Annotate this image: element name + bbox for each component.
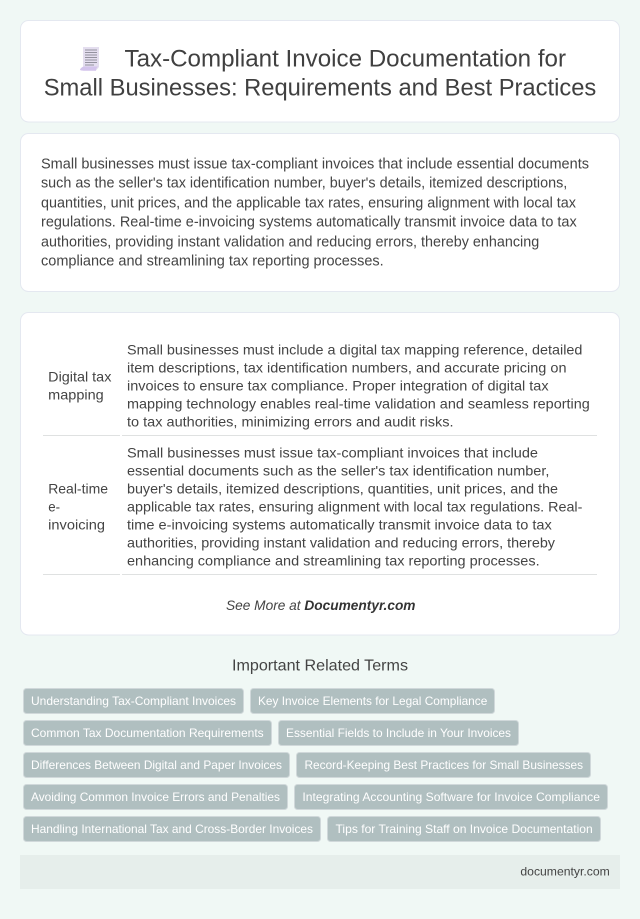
row description: authorities, providing instant validation and reducing errors, thereby [127,534,555,550]
row description: time e-invoicing systems automatically transmit invoice data to tax [127,516,552,532]
summary text: authorities, providing instant validation and reducing errors, thereby enhancing [41,234,539,250]
tag: Tips for Training Staff on Invoice Documentation [336,822,593,836]
tag [278,720,518,746]
tag: Understanding Tax-Compliant Invoices [31,694,236,708]
tag [294,784,608,810]
row description: mapping technology enables real-time validation and seamless reporting [127,395,590,411]
panel: details table card [20,312,620,635]
footer text: documentyr.com [520,865,610,879]
row label [48,368,111,402]
summary text: Small businesses must issue tax-compliant invoices that include essential documents [41,155,589,172]
icon: invoice receipt [80,47,99,71]
tag [296,752,590,778]
tag: Differences Between Digital and Paper Invoices [31,758,282,772]
panel: summary card [20,134,620,292]
tag: Record-Keeping Best Practices for Small Businesses [304,758,583,772]
summary text: such as the seller's tax identification number, buyer's details, itemized descriptions, [41,174,567,192]
tag: Key Invoice Elements for Legal Compliance [258,694,488,708]
title: Tax-Compliant Invoice Documentation for [124,46,566,73]
tag: Handling International Tax and Cross-Border Invoices [31,822,313,836]
tag: Avoiding Common Invoice Errors and Penalties [31,790,280,804]
row label: mapping [48,386,104,402]
row description: Small businesses must issue tax-compliant invoices that include [127,444,538,460]
row label [48,480,108,532]
tag [24,784,288,810]
row description: to tax authorities, minimizing errors and audit risks. [127,413,454,429]
tag [24,688,244,714]
tag [24,752,290,778]
row label: invoicing [48,516,105,532]
row description: buyer's details, itemized descriptions, quantities, unit prices, and the [127,480,558,496]
title: Small Businesses: Requirements and Best Practices [44,75,596,102]
tag [24,720,272,746]
panel: title card [20,20,620,122]
summary text: quantities, unit prices, and the applicable tax rates, ensuring alignment with local tax [41,194,576,211]
row description: invoices to ensure tax compliance. Proper integration of digital tax [127,377,549,393]
summary text [41,155,589,270]
tag: Essential Fields to Include in Your Invoices [286,726,511,740]
summary text: compliance and streamlining tax reporting processes. [41,253,384,270]
row label: Real-time [48,480,108,496]
title [44,46,596,102]
tag [250,688,494,714]
row description: Small businesses must include a digital tax mapping reference, detailed [127,341,582,357]
row label: Digital tax [48,368,111,384]
see more link: See More at Documentyr.com [226,597,416,613]
tag [24,816,320,842]
tag [328,816,600,842]
summary text: regulations. Real-time e-invoicing systems automatically transmit invoice data to tax [41,214,577,231]
row description: enhancing compliance and streamlining tax reporting processes. [127,552,540,568]
row label: e- [48,498,60,514]
table row: digital tax mapping [43,341,597,436]
tag: Integrating Accounting Software for Invoice Compliance [302,790,600,804]
footer bar [20,855,620,889]
related terms tags [24,688,608,842]
heading: important related terms: Important Related Terms [232,658,408,675]
row description: essential documents such as the seller's tax identification number, [127,462,549,478]
row description [127,341,590,429]
row description: applicable tax rates, ensuring alignment with local tax regulations. Real- [127,498,583,514]
row description [127,444,583,568]
table row: real-time e-invoicing [43,444,597,574]
row description: item descriptions, tax identification numbers, and accurate pricing on [127,359,566,375]
tag: Common Tax Documentation Requirements [31,726,264,740]
